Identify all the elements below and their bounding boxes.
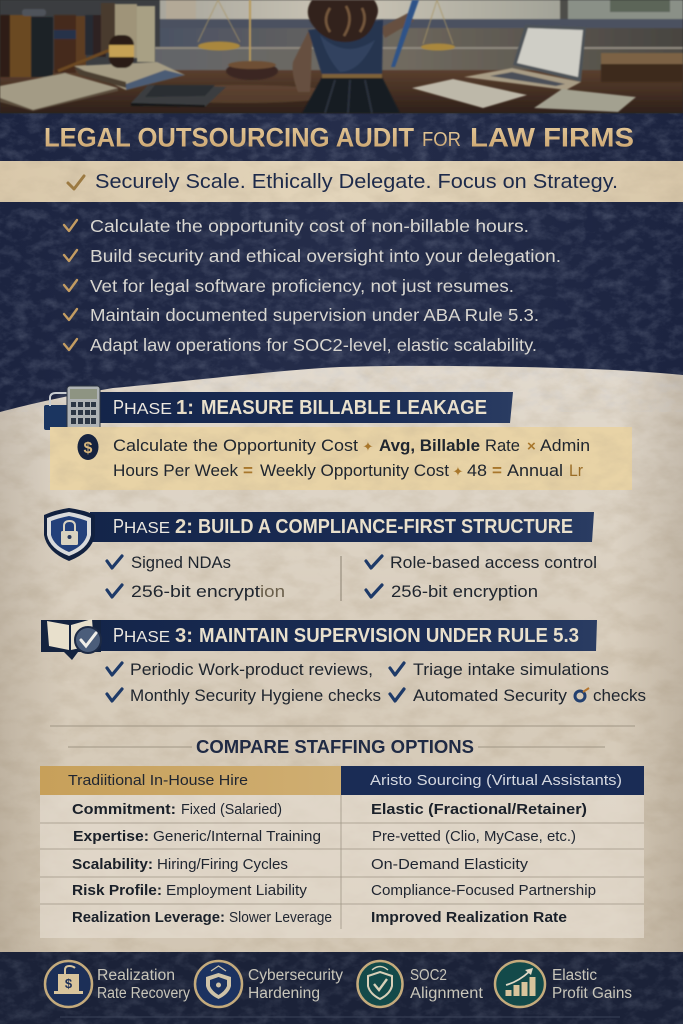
checklist: phase 3: checks (593, 686, 646, 705)
formula callout box: Hours Per Week (113, 461, 238, 480)
formula callout box: Rate (485, 436, 520, 455)
heading bar: phase 1: 1: (176, 397, 194, 419)
left books (0, 15, 10, 77)
heading bar: phase 2: BUILD A COMPLIANCE-FIRST STRUCTURE (198, 516, 573, 538)
table row: scalability: Hiring/Firing Cycles (157, 857, 288, 873)
panel: phase 3 (41, 619, 646, 705)
formula callout box: ✦ (363, 439, 374, 454)
footer badge: realization rate recovery: $ (65, 976, 73, 991)
table row: scalability (72, 856, 529, 873)
footer badge: cybersecurity hardening (195, 961, 343, 1007)
table row: commitment (72, 801, 587, 818)
table row: commitment: Commitment: (72, 801, 176, 818)
open book and stack (74, 62, 185, 90)
checklist: intro bullets: Adapt law operations for SOC2-level, elastic scalability. (90, 335, 537, 355)
footer badge: elastic profit gains: Profit Gains (552, 985, 632, 1002)
formula callout box: Calculate the Opportunity Cost (113, 436, 358, 455)
table row: commitment: Fixed (Salaried) (181, 802, 282, 818)
laptop (513, 25, 586, 82)
heading bar: phase 3: 3: (175, 625, 193, 647)
footer badge: cybersecurity hardening: Hardening (248, 985, 320, 1002)
formula callout box: Lr (569, 461, 583, 480)
checklist: phase 2: Role-based access control (390, 553, 597, 572)
table row: risk profile (72, 882, 596, 899)
title: LAW FIRMS (470, 122, 634, 152)
table row: scalability: Scalability: (72, 856, 153, 873)
table row: realization leverage: Realization Leverage: (72, 909, 225, 926)
table row: expertise: Generic/Internal Training (153, 829, 321, 845)
heading bar: phase 3: MAINTAIN SUPERVISION UNDER RULE 5.3 (199, 625, 579, 647)
heading bar: phase 2: HASE (124, 520, 170, 537)
table header: Aristo Sourcing: Aristo Sourcing (Virtual Assistants) (370, 773, 622, 789)
table row: expertise: Expertise: (73, 828, 149, 845)
checklist: phase 2 (107, 553, 597, 601)
checklist: intro bullets: Build security and ethical oversight into your delegation. (90, 246, 561, 266)
checklist: phase 2: Signed NDAs (131, 553, 231, 572)
checklist: phase 2: 256-bit encryption (391, 582, 538, 601)
checklist: phase 3: Monthly Security Hygiene checks (130, 686, 381, 705)
tagline banner (0, 161, 683, 202)
heading bar: phase 3: HASE (124, 629, 170, 646)
scale (249, 0, 251, 64)
section heading: compare staffing options: COMPARE STAFFING OPTIONS (196, 737, 474, 757)
checklist: intro bullets: Maintain documented supervision under ABA Rule 5.3. (90, 305, 539, 325)
heading bar: phase 3 (90, 620, 597, 651)
table header: in-house (40, 766, 341, 795)
hero illustration: desk with scales, woman, books, laptop (0, 0, 683, 113)
icon: calculator and phone (44, 386, 100, 430)
checklist: phase 3 (107, 660, 646, 705)
formula callout box: = (492, 461, 502, 480)
icon: open book with check (41, 619, 101, 660)
table row: expertise: Pre-vetted (Clio, MyCase, etc.) (372, 829, 576, 845)
formula callout box: Weekly Opportunity Cost (260, 461, 449, 480)
table row: risk profile: Employment Liability (166, 883, 308, 899)
checklist: phase 2: 256-bit encrypt (131, 582, 260, 601)
table row: risk profile: Compliance-Focused Partnership (371, 883, 596, 899)
table row: realization leverage: Improved Realization Rate (371, 909, 567, 926)
heading bar: phase 1: P (113, 397, 124, 419)
table row: expertise (73, 828, 576, 845)
heading bar: phase 2 (90, 512, 594, 542)
formula callout box: = (243, 461, 253, 480)
footer badge: SOC2 alignment: Alignment (410, 985, 484, 1002)
heading bar: phase 3: P (113, 625, 124, 647)
checklist: intro bullets: Vet for legal software proficiency, not just resumes. (90, 276, 514, 296)
checklist: phase 3: Periodic Work-product reviews, (130, 660, 373, 679)
checklist: phase 3: Triage intake simulations (413, 660, 609, 679)
title (44, 122, 634, 152)
icon: dollar coin (78, 434, 98, 460)
formula callout box: 48 (467, 461, 487, 480)
footer badge: elastic profit gains: Elastic (552, 967, 597, 984)
woman (293, 30, 312, 92)
formula callout box: Avg, Billable (379, 436, 480, 455)
dark book (131, 85, 226, 107)
footer band (0, 952, 683, 1024)
table row: risk profile: Risk Profile: (72, 882, 162, 899)
footer badge: realization rate recovery: Realization (97, 967, 175, 984)
heading bar: phase 1: MEASURE BILLABLE LEAKAGE (201, 397, 487, 419)
checklist: intro bullets (64, 216, 561, 355)
panel: navy intro background (0, 113, 683, 412)
table row: commitment: Elastic (Fractional/Retainer) (371, 801, 587, 818)
table row: realization leverage (72, 909, 567, 926)
checklist: phase 3: Automated Security (413, 686, 568, 705)
tagline banner: Securely Scale. Ethically Delegate. Focus on Strategy. (95, 171, 618, 193)
icon: shield with padlock (44, 508, 95, 561)
formula callout box: Annual (507, 461, 563, 480)
table header: in-house: Tradiitional In-House Hire (68, 773, 248, 789)
comparison table (40, 766, 644, 938)
heading bar: phase 1: HASE (124, 401, 172, 418)
footer badge: realization rate recovery (45, 961, 190, 1007)
table header: Aristo Sourcing (341, 766, 644, 795)
formula callout box: ✦ (453, 464, 464, 479)
formula callout box (50, 427, 632, 490)
formula callout box: × (527, 438, 536, 455)
papers (412, 79, 527, 108)
footer badge: elastic profit gains (495, 961, 632, 1007)
checklist: intro bullets: Calculate the opportunity cost of non-billable hours. (90, 216, 529, 236)
right books (601, 53, 683, 64)
heading bar: phase 2: 2: (175, 516, 193, 538)
gavel (58, 50, 110, 71)
panel: phase 1 (44, 386, 632, 490)
table row: realization leverage: Slower Leverage (229, 910, 332, 926)
checklist: phase 2: ion (260, 582, 285, 601)
table row: scalability: On-Demand Elasticity (371, 856, 529, 873)
footer badge: cybersecurity hardening: Cybersecurity (248, 967, 343, 984)
footer badge: SOC2 alignment: SOC2 (410, 967, 447, 984)
panel: parchment background (0, 360, 683, 960)
footer badge: SOC2 alignment (358, 961, 484, 1007)
heading bar: phase 1 (95, 392, 513, 423)
heading bar: phase 2: P (113, 516, 124, 538)
formula callout box: Admin (540, 436, 590, 455)
title: LEGAL OUTSOURCING AUDIT (44, 122, 414, 152)
panel: phase 2 (44, 508, 597, 601)
icon: dollar coin: $ (84, 440, 93, 457)
footer badge: realization rate recovery: Rate Recovery (97, 985, 190, 1002)
title: FOR (422, 129, 461, 151)
